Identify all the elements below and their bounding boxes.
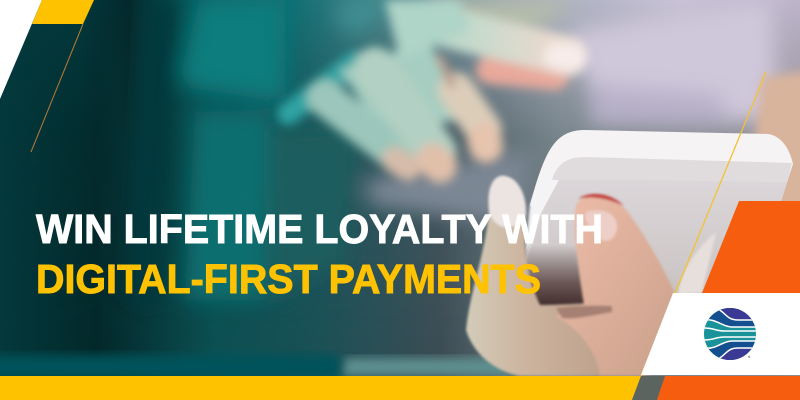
logo: striped globe xyxy=(700,308,756,360)
accent line right xyxy=(641,72,766,376)
shape: white top-left corner xyxy=(0,0,42,99)
shape: yellow top tab xyxy=(32,0,94,24)
accent line left xyxy=(31,24,83,152)
phone xyxy=(520,130,793,330)
shape: photo strip between bars xyxy=(632,376,665,400)
blurred background stripe low xyxy=(340,358,520,376)
title line 1: WIN LIFETIME LOYALTY WITH xyxy=(36,206,603,252)
shape: orange block upper right xyxy=(702,201,800,293)
shape: white logo band xyxy=(641,293,800,375)
holding hand xyxy=(466,176,716,376)
shirt folds xyxy=(130,0,780,300)
registered mark: ® xyxy=(748,355,751,359)
title line 2: DIGITAL-FIRST PAYMENTS xyxy=(36,256,541,302)
blurred pointing hand xyxy=(288,0,574,168)
shape: orange block lower right xyxy=(657,376,800,400)
shape: yellow bottom bar xyxy=(0,376,641,400)
skin of arm right xyxy=(745,70,800,215)
